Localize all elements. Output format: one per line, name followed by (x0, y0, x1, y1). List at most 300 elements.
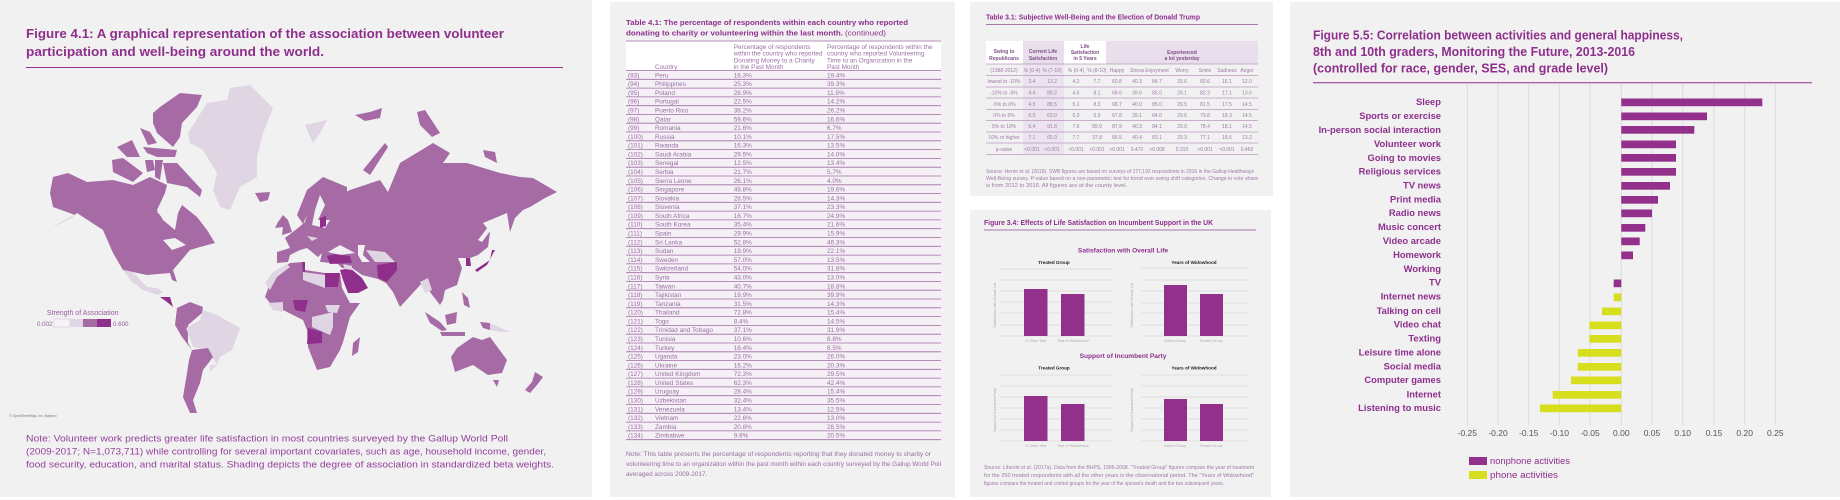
table 3.1 grid: 13.6 (1242, 90, 1252, 96)
x axis labels: 0.00 (1613, 428, 1630, 438)
chart: satisfaction, years of widowhood: Years of Widowhood (1171, 260, 1217, 265)
activity labels: Working (1404, 263, 1441, 274)
activity labels: Radio news (1389, 207, 1441, 218)
table body: country rows: 13.4% (827, 160, 845, 167)
note: figure 4.1: (2009-2017; N=1,073,711) while controlling for several important covariates, such as age, household income, gender, (26, 446, 546, 458)
note: table 3.1: Source: Herrin et al. (2018). SWB figures are based on surveys of 177,192 respondents in 2016 in the Gallup-Healthways (986, 169, 1254, 175)
table 3.1 grid: 66.5 (1112, 135, 1122, 141)
title: table 4.1 (626, 18, 908, 38)
legend (1469, 456, 1571, 480)
table body: country rows: 19.9% (734, 292, 752, 299)
table header: Percentage of respondents within the (827, 44, 933, 51)
table body: country rows: Switzerland (655, 266, 688, 273)
table 3.1 grid: 13.2 (1242, 135, 1252, 141)
table 3.1 grid: 33.6 (1177, 79, 1187, 85)
note: figure 3.4: Source: Liberini et al. (2017a). Data from the BHPS, 1996-2008. "Treated Group" figures compare the year of treatment (984, 465, 1254, 471)
table 3.1 grid: <0.001 (1109, 147, 1125, 153)
table body: country rows: Sri Lanka (655, 239, 682, 246)
table body: country rows: (111) (628, 230, 642, 238)
table body: country rows: 39.3% (827, 81, 845, 88)
table 3.1 grid: -5% to 0% (992, 102, 1016, 108)
table body: country rows: (128) (628, 380, 643, 387)
table 3.1 grid: Sadness (1217, 68, 1237, 74)
table body: country rows: (110) (628, 222, 642, 229)
table 3.1 grid: Satisfaction (1029, 56, 1057, 62)
table body: country rows: 11.9% (827, 90, 845, 97)
table body: country rows: 22.6% (734, 415, 752, 422)
chart: satisfaction, years of widowhood (1130, 260, 1248, 343)
table 3.1 grid: 14.5 (1242, 102, 1252, 108)
chart: satisfaction, treated group: Satisfaction with Overall Life (993, 282, 997, 328)
table body: country rows: Philippines (655, 81, 686, 88)
table 3.1 grid: 7.1 (1029, 135, 1036, 141)
table body: country rows: Venezuela (655, 406, 685, 413)
table 3.1 grid: 65.0 (1047, 135, 1057, 141)
activity labels: TV (1429, 277, 1442, 288)
table body: country rows: 16.3% (734, 72, 752, 79)
table header (626, 41, 941, 71)
table body: country rows: (133) (628, 424, 643, 431)
table 3.1 grid: % (8-10) (1087, 68, 1107, 74)
table body: country rows: 6.7% (827, 125, 842, 132)
activity labels: Homework (1393, 249, 1442, 260)
table body: country rows: 21.6% (827, 222, 845, 229)
table body: country rows: Singapore (655, 187, 685, 194)
table 3.1 grid: 0.460 (1241, 147, 1253, 153)
table 3.1 grid: 7.7 (1073, 135, 1080, 141)
activity labels: Leisure time alone (1359, 347, 1441, 358)
table 3.1 grid: 80.6 (1200, 79, 1210, 85)
activity labels: TV news (1403, 180, 1441, 191)
panel: figure 5.5 bar chart (1290, 2, 1840, 497)
table 3.1 grid: Stress (1130, 68, 1145, 74)
table body: country rows: 16.6% (827, 116, 845, 123)
table body: country rows: Zimbabwe (655, 433, 685, 440)
table body: country rows: 57.0% (734, 257, 752, 264)
table body: country rows: 5.7% (827, 169, 842, 176)
table body: country rows: (98) (628, 116, 639, 123)
table 3.1 grid: 29.3 (1177, 135, 1187, 141)
x axis labels: 0.20 (1736, 428, 1753, 438)
table body: country rows: 28.5% (827, 424, 845, 431)
table 3.1 grid: 7.7 (1094, 79, 1101, 85)
table body: country rows: 14.0% (827, 151, 845, 158)
table body: country rows: Syria (655, 274, 670, 282)
table 3.1 grid: 8.1 (1094, 90, 1101, 96)
note: table 4.1: Note: This table presents the percentage of respondents reporting that they donated money to charity or (626, 451, 932, 458)
chart: support, years of widowhood (1130, 366, 1248, 448)
title: figure 4.1: participation and well-being around the world. (26, 45, 324, 59)
x axis labels: -0.25 (1458, 428, 1477, 438)
table 3.1 grid: 68.7 (1112, 102, 1122, 108)
table 3.1 grid: 6.3 (1073, 113, 1080, 119)
table body: country rows: 28.4% (734, 389, 752, 396)
table 3.1 grid (986, 41, 1258, 154)
table body: country rows: 26.1% (734, 178, 752, 185)
table body: country rows: 35.4% (734, 222, 752, 229)
table body: country rows: Taiwan (655, 283, 675, 290)
bars: nonphone activities (1614, 98, 1762, 287)
table 3.1 grid: 85.0 (1152, 90, 1162, 96)
table body: country rows: Serbia (655, 169, 674, 176)
table 3.1 grid: 18.1 (1222, 124, 1232, 130)
chart: satisfaction, treated group: In Other Year (1025, 339, 1047, 343)
table 3.1 grid: <0.001 (1219, 147, 1235, 153)
table body: country rows: Uzbekistan (655, 398, 687, 404)
table body: country rows: 28.5% (734, 195, 752, 202)
table 3.1 grid: 37.8 (1092, 135, 1102, 141)
table body: country rows: 14.2% (827, 99, 845, 106)
activity labels: Internet (1407, 388, 1441, 399)
table 3.1 grid: 14.5 (1242, 124, 1252, 130)
table 3.1 grid: in 5 Years (1073, 56, 1097, 62)
chart: satisfaction, years of widowhood: Control Group (1164, 339, 1186, 343)
table body: country rows: 8.4% (734, 318, 749, 325)
table body: country rows: 37.1% (734, 204, 752, 211)
note: figure 4.1: Note: Volunteer work predicts greater life satisfaction in most countries surveyed by the Gallup World Poll (26, 434, 508, 444)
table body: country rows: 31.8% (827, 266, 845, 273)
chart: support, treated group (993, 366, 1112, 448)
table body: country rows: (123) (628, 336, 643, 343)
table 3.1 grid: 60.8 (1112, 79, 1122, 85)
activity labels: In-person social interaction (1319, 124, 1441, 135)
table 3.1 grid: a lot yesterday (1164, 56, 1200, 62)
table body: country rows: (125) (628, 354, 643, 361)
table body: country rows: (109) (628, 213, 643, 220)
table 3.1 grid: 39.1 (1132, 113, 1142, 119)
table body: country rows: 8.5% (827, 345, 842, 352)
table body: country rows: (121) (628, 318, 643, 325)
table 3.1 grid: <0.008 (1149, 147, 1165, 153)
x axis labels: 0.25 (1767, 428, 1784, 438)
table body: country rows: 37.1% (734, 327, 752, 334)
map legend: strength of association: Strength of Association (47, 310, 119, 317)
activity labels: Social media (1384, 360, 1442, 371)
map legend: strength of association: 0.002 (37, 321, 53, 328)
table body: country rows: 31.5% (734, 301, 752, 308)
table 3.1 grid: Enjoyment (1145, 68, 1169, 74)
table header: Donating Money to a Charity (734, 57, 815, 64)
table 3.1 grid: 39.6 (1132, 90, 1142, 96)
table 3.1 grid: Experienced (1167, 50, 1197, 56)
table 3.1 grid: Worry (1175, 68, 1189, 74)
table 3.1 grid: 84.1 (1152, 124, 1162, 130)
table 3.1 grid: 4.5 (1029, 102, 1036, 108)
table 3.1 grid: 14.5 (1242, 113, 1252, 119)
note: table 4.1 (626, 451, 941, 478)
table body: country rows (626, 70, 941, 440)
chart group: support of incumbent party: Support of Incumbent Party (1080, 353, 1167, 360)
title: figure 3.4: Figure 3.4: Effects of Life Satisfaction on Incumbent Support in the UK (984, 218, 1213, 227)
table body: country rows: (134) (628, 433, 643, 440)
table 3.1 grid: 5% to 10% (992, 124, 1017, 130)
chart group: support of incumbent party (993, 353, 1248, 448)
table 3.1 grid: 29.1 (1177, 90, 1187, 96)
table body: country rows: 19.4% (827, 72, 845, 79)
table 3.1 grid: 17.5 (1222, 102, 1232, 108)
x axis labels: -0.10 (1550, 428, 1569, 438)
table body: country rows: 26.2% (827, 108, 845, 114)
table 3.1 grid: Republicans (989, 56, 1019, 62)
table body: country rows: 31.9% (827, 327, 845, 334)
table body: country rows: 15.4% (827, 310, 845, 317)
table body: country rows: (112) (628, 239, 642, 246)
table body: country rows: (102) (628, 151, 643, 158)
chart: support, treated group: In Other Year (1025, 444, 1047, 448)
title: figure 5.5: (controlled for race, gender, SES, and grade level) (1313, 60, 1608, 76)
note: figure 4.1 (26, 434, 554, 470)
table body: country rows: 13.5% (827, 143, 845, 150)
table body: country rows: 43.0% (734, 274, 752, 282)
table body: country rows: (114) (628, 257, 642, 264)
table 3.1 grid: 0.310 (1176, 147, 1188, 153)
table body: country rows: 14.5% (827, 318, 845, 325)
table body: country rows: Slovakia (655, 195, 680, 202)
table 3.1 grid: Anger (1240, 68, 1254, 74)
x axis labels: 0.15 (1706, 428, 1723, 438)
activity labels: Print media (1390, 193, 1442, 204)
table 3.1 grid: 4.5 (1073, 90, 1080, 96)
title: figure 4.1: Figure 4.1: A graphical representation of the association between volunteer (26, 27, 504, 41)
table body: country rows: (126) (628, 362, 643, 369)
table body: country rows: 72.3% (734, 371, 752, 378)
table body: country rows: 62.3% (734, 380, 752, 387)
note: figure 3.4 (984, 465, 1254, 487)
table body: country rows: Portugal (655, 99, 679, 106)
table 3.1 grid: 3.4 (1029, 79, 1036, 85)
table 3.1 grid: 7.6 (1073, 124, 1080, 130)
panel: figure 4.1 world map (0, 0, 592, 497)
table 3.1 grid: 6.4 (1029, 124, 1036, 130)
table 3.1 grid: <0.001 (1024, 147, 1040, 153)
note: table 4.1: volunteering time to an organization within the past month within each country surveyed by the Gallup World Poll (626, 461, 941, 468)
table body: country rows: Tunisia (655, 336, 676, 343)
table body: country rows: 13.0% (827, 415, 845, 422)
table body: country rows: (116) (628, 274, 642, 282)
table body: country rows: 24.9% (827, 213, 845, 220)
table body: country rows: Slovenia (655, 204, 680, 211)
table 3.1 grid: 6.0 (1029, 113, 1036, 119)
chart group: satisfaction with overall life: Satisfaction with Overall Life (1078, 248, 1168, 254)
table body: country rows: 23.0% (734, 354, 752, 361)
table body: country rows: United Kingdom (655, 371, 700, 378)
activity labels: Video chat (1394, 319, 1441, 330)
table header: in the Past Month (734, 64, 784, 71)
table 3.1 grid: 18.6 (1222, 135, 1232, 141)
table body: country rows: Tajikistan (655, 292, 682, 299)
chart group: satisfaction with overall life (993, 248, 1248, 343)
table 3.1 grid: 78.4 (1200, 124, 1210, 130)
table body: country rows: 12.5% (734, 160, 752, 167)
table body: country rows: 15.4% (827, 389, 845, 396)
activity labels: Going to movies (1368, 152, 1441, 163)
table body: country rows: 49.8% (734, 187, 752, 194)
table body: country rows: (93) (628, 72, 639, 79)
table header: Country (655, 64, 678, 71)
table body: country rows: (96) (628, 99, 639, 106)
table body: country rows: (100) (628, 134, 643, 141)
table body: country rows: 54.0% (734, 266, 752, 273)
table body: country rows: 29.5% (827, 371, 845, 378)
world map (47, 85, 557, 413)
table body: country rows: United States (655, 380, 693, 387)
table 3.1 grid: 83.1 (1152, 135, 1162, 141)
activity labels: Religious services (1359, 166, 1441, 176)
table body: country rows: 15.9% (827, 230, 845, 238)
chart: support, years of widowhood: Control Group (1164, 444, 1186, 448)
table body: country rows: 13.5% (827, 257, 845, 264)
panel: table 3.1 (970, 2, 1273, 196)
table body: country rows: 8.8% (827, 336, 842, 343)
x axis labels: 0.05 (1644, 428, 1661, 438)
table body: country rows: Vietnam (655, 415, 678, 422)
table body: country rows: (103) (628, 160, 643, 167)
table body: country rows: Thailand (655, 310, 680, 317)
legend: phone activities (1490, 470, 1559, 480)
table body: country rows: South Africa (655, 213, 690, 220)
note: table 3.1 (986, 169, 1258, 189)
table 3.1 grid: 5.1 (1073, 102, 1080, 108)
table 3.1 grid: <0.001 (1197, 147, 1213, 153)
activity labels: Music concert (1378, 221, 1441, 232)
table 3.1 grid: <0.001 (1089, 147, 1105, 153)
table 3.1 grid: Current Life (1029, 49, 1057, 55)
table body: country rows: 16.3% (734, 143, 752, 150)
legend: nonphone activities (1490, 456, 1571, 466)
table body: country rows: 52.8% (734, 239, 752, 246)
table 3.1 grid: 91.8 (1047, 124, 1057, 130)
table 3.1 grid: 63.0 (1047, 113, 1057, 119)
table 3.1 grid: lowest to -10% (988, 79, 1021, 85)
table body: country rows: Uruguay (655, 389, 680, 396)
table body: country rows: 38.2% (734, 108, 752, 114)
title: figure 5.5: Figure 5.5: Correlation between activities and general happiness, (1313, 28, 1683, 42)
table body: country rows: Romania (655, 125, 681, 132)
table body: country rows: 9.9% (734, 433, 749, 440)
table body: country rows: 23.3% (827, 204, 845, 211)
table header: within the country who reported (733, 51, 823, 58)
panel: figure 3.4 (970, 210, 1271, 497)
table 3.1 grid: Satisfaction (1071, 50, 1099, 56)
table body: country rows: Saudi Arabia (655, 151, 692, 158)
table 3.1 grid: Smile (1199, 68, 1211, 74)
activity labels: Internet news (1381, 291, 1441, 302)
table body: country rows: 13.4% (734, 406, 752, 413)
activity labels: Texting (1408, 332, 1441, 343)
table body: country rows: 4.0% (827, 178, 842, 185)
table 3.1 grid: Swing to (994, 49, 1014, 55)
table 3.1 grid: 8.3 (1094, 102, 1101, 108)
table body: country rows: Togo (655, 318, 669, 325)
table 3.1 grid: -10% to -5% (990, 90, 1018, 96)
activity labels (1319, 96, 1442, 413)
table header: Percentage of respondents (734, 44, 810, 51)
table body: country rows: 19.6% (827, 187, 845, 194)
table 3.1 grid: 29.6 (1177, 113, 1187, 119)
map legend: strength of association: 0.600 (113, 321, 129, 328)
table body: country rows: (94) (628, 81, 639, 88)
table 3.1 grid: 40.3 (1132, 124, 1142, 130)
table body: country rows: 10.6% (734, 336, 752, 343)
table 3.1 grid: 40.0 (1132, 102, 1142, 108)
x axis labels: 0.10 (1674, 428, 1691, 438)
table 3.1 grid: 81.5 (1200, 102, 1210, 108)
table 3.1 grid: 84.0 (1152, 113, 1162, 119)
table body: country rows: 29.5% (734, 151, 752, 158)
activity labels: Computer games (1364, 374, 1441, 385)
chart: satisfaction, treated group (993, 260, 1112, 343)
table 3.1 grid: 40.3 (1132, 79, 1142, 85)
table body: country rows: (108) (628, 204, 643, 211)
table 3.1 grid: 0.470 (1131, 147, 1143, 153)
table body: country rows: 22.1% (827, 248, 845, 255)
table 3.1 grid: 0% to 5% (993, 113, 1015, 119)
chart: support, years of widowhood: Treated Group (1199, 444, 1223, 448)
table 3.1 grid: % (0-4) (1068, 68, 1085, 74)
table body: country rows: 12.5% (827, 406, 845, 413)
table 3.1 grid: Happy (1110, 68, 1125, 74)
bars: phone activities (1540, 294, 1621, 412)
title: figure 4.1 (26, 27, 504, 59)
table body: country rows: 72.8% (734, 310, 752, 317)
table body: country rows: Trinidad and Tobago (655, 327, 713, 334)
table body: country rows: (105) (628, 178, 643, 185)
table body: country rows: 10.1% (734, 134, 752, 141)
table 3.1 grid: 12.0 (1242, 79, 1252, 85)
activity labels: Talking on cell (1377, 305, 1441, 316)
table body: country rows: (118) (628, 292, 642, 299)
gridlines (1467, 84, 1775, 425)
table 3.1 grid: 29.0 (1177, 124, 1187, 130)
table body: country rows: (132) (628, 415, 643, 422)
table 3.1 grid: 88.5 (1047, 102, 1057, 108)
table body: country rows: 42.4% (827, 380, 845, 387)
table body: country rows: (101) (628, 143, 643, 150)
table body: country rows: 14.3% (827, 195, 845, 202)
table body: country rows: (95) (628, 90, 639, 97)
chart: support, treated group: Treated Group (1038, 366, 1070, 370)
table header: Time to an Organization in the (827, 57, 913, 64)
table body: country rows: Spain (655, 230, 672, 238)
table body: country rows: 28.9% (734, 90, 752, 97)
title: table 4.1: donating to charity or volunteering within the last month. (626, 28, 843, 38)
activity labels: Video arcade (1383, 235, 1441, 246)
table body: country rows: Rwanda (655, 143, 679, 150)
table body: country rows: 21.6% (734, 125, 752, 132)
table body: country rows: (127) (628, 371, 643, 378)
panel: table 4.1 (610, 2, 955, 497)
table 3.1 grid: 13.2 (1047, 79, 1057, 85)
map attribution: © OpenStreetMap, Inc. Mapbox (9, 414, 57, 418)
table body: country rows: (107) (628, 195, 643, 202)
chart: support, treated group: Support of Incumbent Party (993, 388, 997, 432)
table 3.1 grid: 16.1 (1222, 79, 1232, 85)
table body: country rows: Peru (655, 72, 669, 79)
table body: country rows: (120) (628, 310, 643, 317)
table body: country rows: (99) (628, 125, 639, 132)
table body: country rows: (104) (628, 169, 643, 176)
table body: country rows: 16.2% (734, 362, 752, 369)
note: table 3.1: is from 2012 to 2016. All figures are at the county level. (986, 183, 1128, 189)
table body: country rows: (122) (628, 327, 643, 334)
table body: country rows: Uganda (655, 354, 678, 361)
table 3.1 grid: 17.1 (1222, 90, 1232, 96)
table 3.1 grid: 67.8 (1112, 113, 1122, 119)
note: figure 3.4: figures compare the treated and control groups for the year of the spouse's death and the two subsequent years. (984, 481, 1224, 487)
table 3.1 grid: 4.2 (1073, 79, 1080, 85)
note: figure 3.4: for the 250 treated respondents with all the other years in the observational period. The "Years of Widowhood" (984, 473, 1254, 479)
note: figure 4.1: food security, education, and marital status. Shading depicts the degree of association in standardized beta weights. (26, 460, 554, 470)
